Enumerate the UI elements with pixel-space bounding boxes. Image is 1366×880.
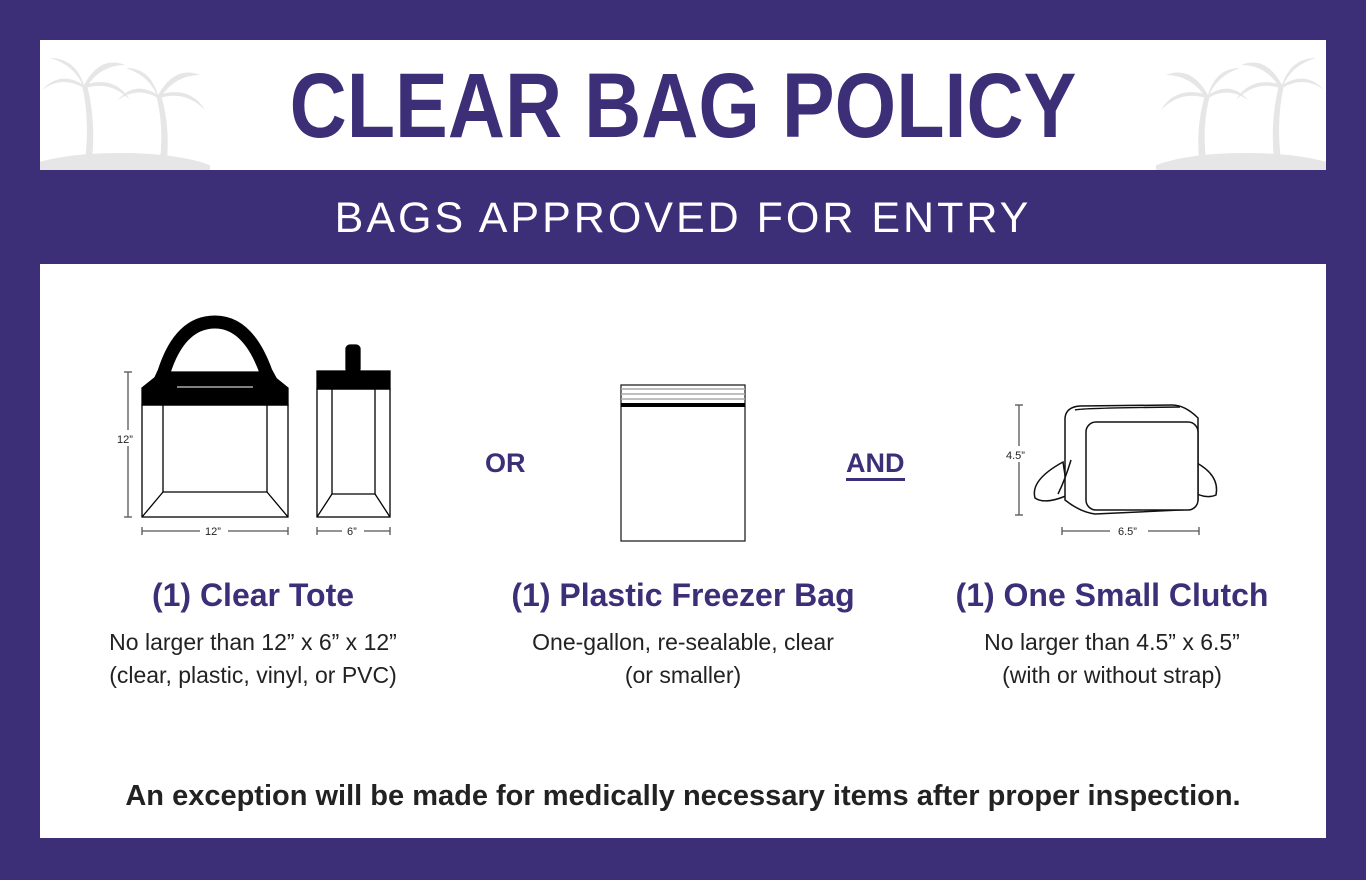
item: freezer bag bbox=[511, 577, 855, 688]
icon: clear tote: 12” bbox=[117, 434, 133, 446]
label: AND: AND bbox=[846, 448, 904, 478]
icon: small clutch bbox=[1006, 404, 1218, 538]
heading: freezer bag: (1) Plastic Freezer Bag bbox=[511, 577, 855, 613]
text: clutch size: (with or without strap) bbox=[1002, 662, 1222, 688]
text: clutch size: No larger than 4.5” x 6.5” bbox=[984, 629, 1240, 655]
header band bbox=[40, 40, 1326, 170]
text: freezer bag size: (or smaller) bbox=[625, 662, 741, 688]
label: OR: OR bbox=[485, 448, 526, 478]
heading: clear tote: (1) Clear Tote bbox=[152, 577, 354, 613]
subtitle: BAGS APPROVED FOR ENTRY bbox=[335, 194, 1031, 242]
item: clear tote bbox=[109, 577, 397, 688]
text: tote size bbox=[109, 629, 397, 688]
icon: small clutch: 6.5” bbox=[1118, 526, 1137, 538]
text: freezer bag size: One-gallon, re-sealable, clear bbox=[532, 629, 834, 655]
item: small clutch bbox=[956, 577, 1268, 688]
title: CLEAR BAG POLICY bbox=[290, 55, 1076, 157]
text: tote size: No larger than 12” x 6” x 12” bbox=[109, 629, 397, 655]
icon: clear tote bbox=[117, 316, 391, 538]
text: freezer bag size bbox=[532, 629, 834, 688]
icon: clear tote: 6” bbox=[347, 526, 357, 538]
icon: small clutch: 4.5” bbox=[1006, 450, 1025, 462]
icon: clear tote: 12” bbox=[205, 526, 221, 538]
main panel bbox=[40, 264, 1326, 838]
heading: clutch: (1) One Small Clutch bbox=[956, 577, 1268, 613]
text: tote size: (clear, plastic, vinyl, or PVC) bbox=[109, 662, 397, 688]
footer note: An exception will be made for medically necessary items after proper inspection. bbox=[125, 780, 1241, 812]
icon: palm trees left bbox=[40, 58, 210, 170]
text: clutch size bbox=[984, 629, 1240, 688]
icon: freezer bag bbox=[620, 384, 746, 542]
icon: palm trees right bbox=[1156, 58, 1326, 170]
